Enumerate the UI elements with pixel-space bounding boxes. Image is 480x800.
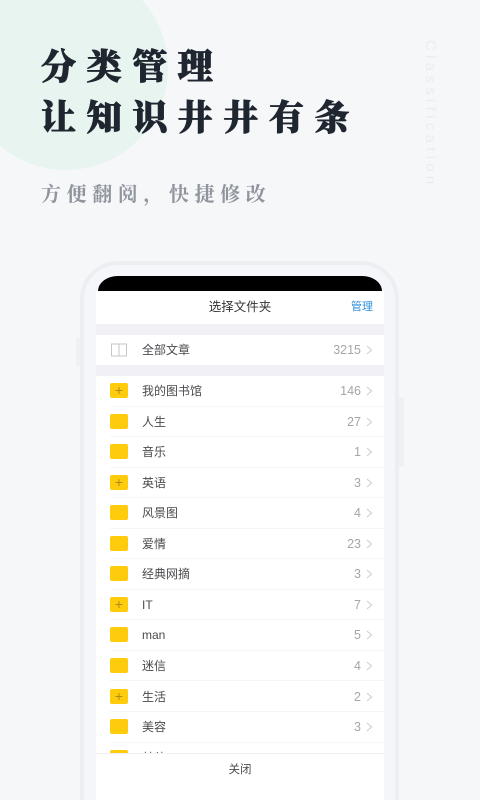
- row: IT: IT: [142, 598, 153, 612]
- navigation bar: [96, 291, 384, 324]
- phone: [80, 261, 399, 800]
- row: man: 5: [354, 628, 361, 642]
- row: 风景图: [96, 498, 384, 529]
- manage link: 管理: [351, 301, 373, 313]
- subtitle: 方便翻阅，快捷修改: [41, 184, 271, 206]
- screen: [96, 291, 384, 800]
- row: 我的图书馆: 我的图书馆: [142, 384, 202, 398]
- title: [41, 48, 360, 138]
- status bar: [98, 276, 382, 291]
- row: IT: +: [115, 596, 123, 612]
- row: 美容: 美容: [142, 720, 166, 734]
- nav title: 选择文件夹: [209, 300, 271, 314]
- row: 经典网摘: 经典网摘: [142, 567, 190, 581]
- row: 迷信: [96, 651, 384, 681]
- row: 音乐: [96, 437, 384, 468]
- row: 英语: 英语: [142, 476, 166, 490]
- icon: book: [111, 344, 127, 356]
- row: 爱情: 23: [347, 537, 361, 551]
- row: 生活: 生活: [142, 690, 166, 704]
- row: partially hidden: [96, 743, 384, 753]
- all articles row: [96, 335, 384, 365]
- row: man: man: [142, 628, 165, 642]
- row: 英语: +: [115, 474, 123, 490]
- vertical english label: Classification: [422, 40, 439, 189]
- title: 让知识井井有条: [41, 99, 360, 138]
- row: 经典网摘: 3: [354, 567, 361, 581]
- row: 生活: +: [115, 688, 123, 704]
- row: 我的图书馆: +: [115, 382, 123, 398]
- row: 人生: 27: [347, 415, 361, 429]
- row: 我的图书馆: [96, 376, 384, 407]
- row: 经典网摘: [96, 559, 384, 590]
- row: 英语: [96, 468, 384, 498]
- decorative circle: [0, 0, 168, 170]
- row: 美容: [96, 712, 384, 743]
- close sheet: [96, 753, 384, 800]
- row: 风景图: 风景图: [142, 506, 178, 520]
- all articles row: 3215: [333, 343, 361, 357]
- row: 迷信: 4: [354, 659, 361, 673]
- row: IT: [96, 590, 384, 620]
- row: 我的图书馆: 146: [340, 384, 361, 398]
- row: 人生: [96, 407, 384, 437]
- row: IT: 7: [354, 598, 361, 612]
- title: 分类管理: [41, 48, 223, 87]
- row: 生活: [96, 682, 384, 712]
- row: 英语: 3: [354, 476, 361, 490]
- row: 迷信: 迷信: [142, 659, 166, 673]
- folder list: [96, 376, 384, 753]
- phone frame: [80, 261, 399, 800]
- row: 人生: 人生: [142, 415, 166, 429]
- row: 爱情: 爱情: [142, 537, 166, 551]
- close button text: 关闭: [228, 764, 252, 776]
- row: 生活: 2: [354, 690, 361, 704]
- phone side button right: [398, 397, 404, 467]
- row: man: [96, 620, 384, 651]
- all articles row: 全部文章: [142, 343, 190, 357]
- row: 音乐: 音乐: [142, 445, 166, 459]
- row: 美容: 3: [354, 720, 361, 734]
- row: 爱情: [96, 529, 384, 559]
- row: 音乐: 1: [354, 445, 361, 459]
- phone side button upper left: [76, 338, 82, 366]
- row: 风景图: 4: [354, 506, 361, 520]
